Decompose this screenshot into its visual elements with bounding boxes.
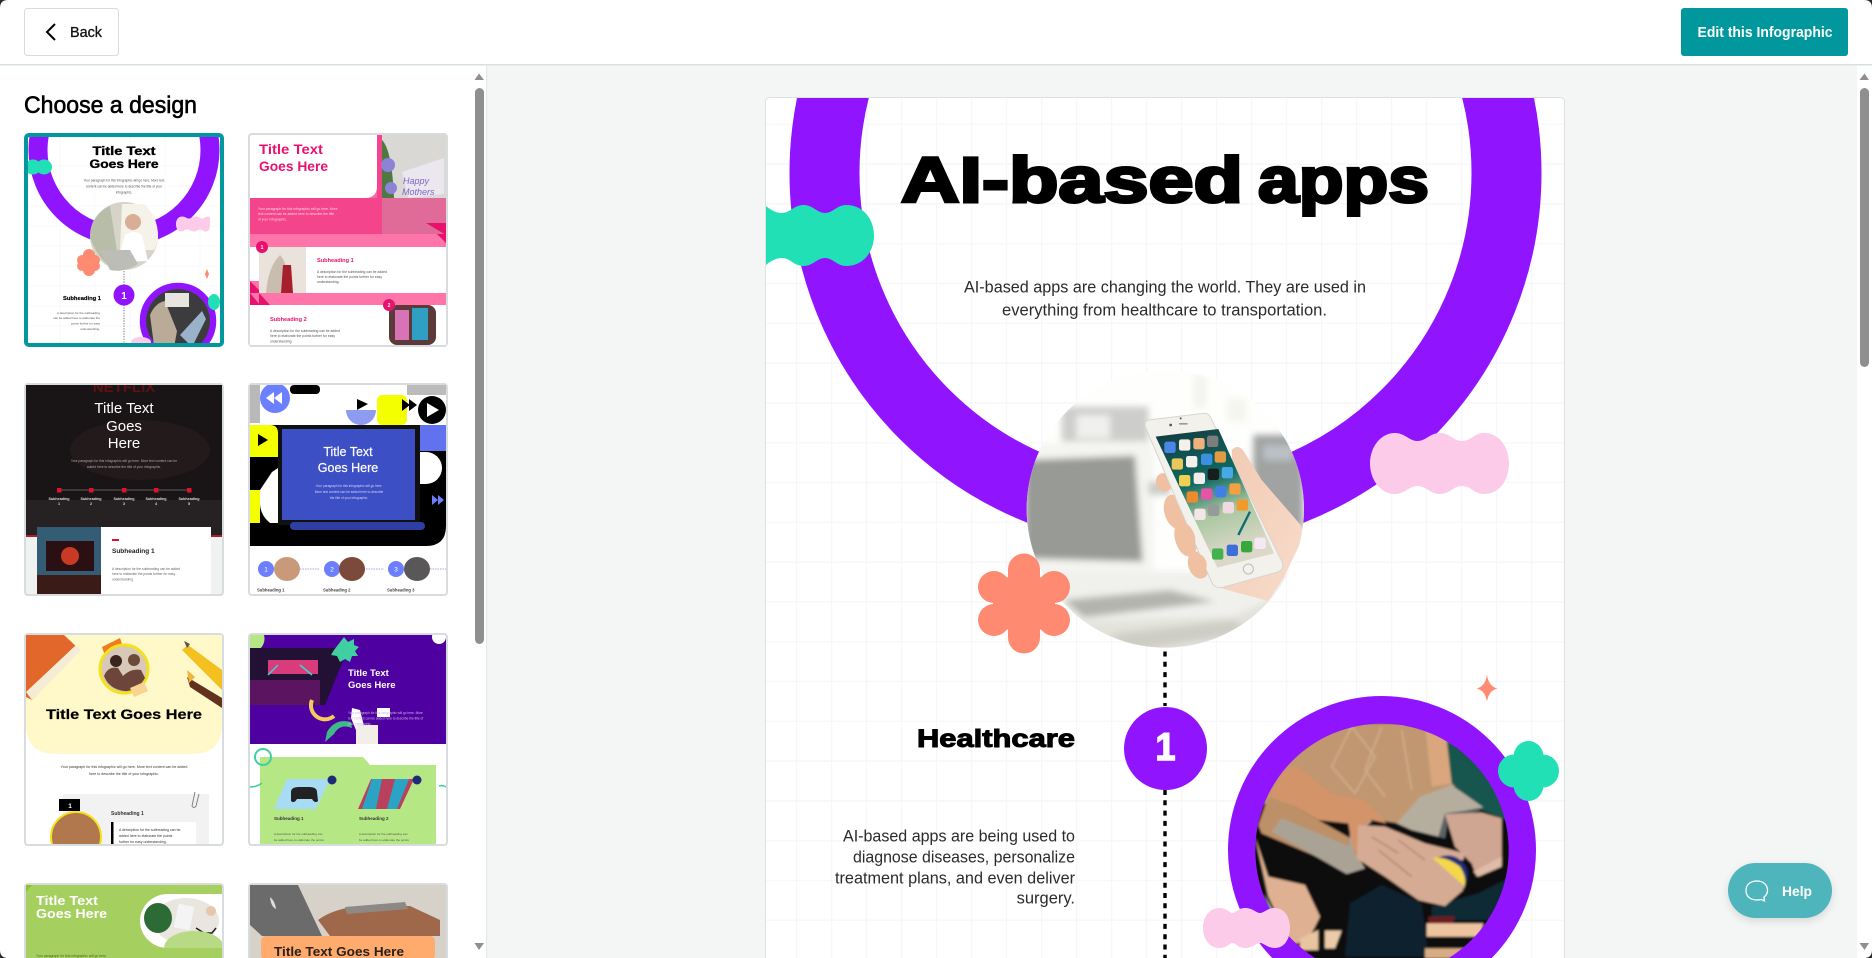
template thumbnail 3: netflix: here to elaborate the points further for easy (112, 572, 176, 576)
template thumbnail 5: school: 1 (68, 803, 72, 810)
blob: pink (1370, 433, 1509, 494)
left scrollbar (474, 65, 488, 958)
header bar (0, 0, 1872, 66)
template thumbnail 6: concert: A description for the subheading can (359, 832, 408, 836)
template thumbnail 3: netflix: Here (108, 435, 140, 452)
purple ring (824, 0, 1506, 514)
template thumbnail 1: selected: infographic. (116, 190, 132, 194)
back button (24, 8, 118, 56)
right scrollbar (1857, 66, 1872, 958)
template thumbnail 5: school: here to describe the title of your infographic. (89, 772, 159, 776)
template thumbnail 2: mothers day: Subheading 2 (270, 317, 307, 323)
template thumbnail 1: selected: Goes Here (90, 159, 158, 171)
template thumbnail 3: netflix: understanding. (112, 578, 134, 582)
template thumbnail 2: mothers day: A description for the subheading can be added (317, 270, 387, 274)
template thumbnail 3: netflix (25, 379, 223, 595)
template thumbnail 3: netflix: Subheading 1 (112, 548, 155, 555)
template thumbnail 3: netflix: Subheading (178, 497, 200, 501)
photo ring: elderly hands (1242, 710, 1522, 958)
template thumbnail 3: netflix: Title Text (94, 400, 154, 417)
heading: choose a design: Choose a design (24, 92, 197, 119)
template thumbnail 2: mothers day: Subheading 1 (317, 258, 354, 264)
template thumbnail 6: concert: Title Text (348, 668, 390, 679)
template thumbnail 3: netflix: A description for the subheading can be added (112, 567, 180, 571)
template thumbnail 4: media player: Title Text (323, 445, 373, 459)
template thumbnail 6: concert: Subheading 1 (274, 816, 304, 821)
template thumbnail 2: mothers day: A description for the subheading can be added (270, 329, 340, 333)
template thumbnail 1: selected: Your paragraph for this infographic will go here. More text (84, 178, 165, 182)
template thumbnail 1: selected: content can be added here to describe the title of your (86, 184, 163, 188)
template thumbnail 3: netflix: added here to describe the title of your infographic. (87, 465, 161, 469)
template thumbnail 2: mothers day: of your infographic. (258, 218, 287, 222)
healthcare description: treatment plans, and even deliver (835, 870, 1075, 888)
template thumbnail 8: payment (249, 884, 447, 958)
phone body (1145, 413, 1283, 588)
photo: hand holding smartphone (1020, 365, 1310, 655)
template thumbnail 4: media player: 1 (264, 566, 268, 574)
template thumbnail 6: concert (249, 630, 447, 846)
template thumbnail 5: school: Title Text Goes Here (46, 707, 203, 722)
icon: coral sparkle (1476, 674, 1498, 702)
template thumbnail 3: netflix: Subheading (48, 497, 70, 501)
template thumbnail 5: school: added here to elaborate the points (119, 834, 173, 838)
template thumbnail 6: concert: be added here to elaborate the points (274, 838, 324, 842)
template thumbnail 2: mothers day: text content can be added here to describe the title (258, 212, 334, 216)
intro paragraph: AI-based apps are changing the world. They are used in (964, 278, 1366, 296)
template thumbnail 3: netflix: 4 (155, 502, 158, 506)
template thumbnail 3: netflix: Subheading (113, 497, 135, 501)
healthcare description: diagnose diseases, personalize (853, 848, 1075, 866)
main title (900, 154, 1428, 217)
template thumbnail 3: netflix: 2 (90, 502, 92, 506)
fingertips over phone edge (1186, 524, 1207, 570)
template thumbnail 6: concert: Your paragraph for this infographic will go here. More (348, 711, 423, 715)
template thumbnail 6: concert: Goes Here (348, 680, 396, 691)
help button: Help (1782, 883, 1812, 899)
template thumbnail 5: school: Subheading 1 (111, 811, 144, 817)
healthcare description (835, 828, 1075, 908)
template thumbnail 3: netflix: Your paragraph for this infographic will go here. More text content can be (71, 459, 177, 463)
template thumbnail 4: media player: Goes Here (318, 461, 378, 475)
template thumbnail 3: netflix: Subheading (80, 497, 102, 501)
blob: small pink (1203, 908, 1290, 948)
template thumbnail 2: mothers day: Happy (403, 176, 430, 186)
template thumbnail 3: netflix: Goes (106, 418, 142, 435)
template thumbnail 1: selected: 1 (121, 291, 127, 302)
template thumbnail 2: mothers day (249, 134, 447, 346)
template thumbnail 4: media player: 2 (330, 566, 334, 574)
intro paragraph: everything from healthcare to transportation. (1002, 302, 1327, 320)
template thumbnail 5: school: A description for the subheading can be (119, 828, 181, 832)
healthcare description: AI-based apps are being used to (843, 828, 1075, 846)
template thumbnail 1: selected (24, 133, 224, 347)
template thumbnail 2: mothers day: 2 (388, 303, 391, 309)
template thumbnail 2: mothers day: Mothers (402, 187, 435, 197)
template thumbnail 1: selected: can be added here to elaborate the (53, 316, 100, 320)
template thumbnail 2: mothers day: here to elaborate the points further for easy (270, 334, 335, 338)
template thumbnail 4: media player (249, 383, 447, 595)
blob: teal (766, 205, 874, 266)
dashed connector (1163, 652, 1167, 958)
template thumbnail 2: mothers day: understanding. (317, 280, 339, 284)
intro paragraph (964, 278, 1366, 320)
subheading: healthcare: Healthcare (917, 725, 1075, 753)
template thumbnail 7: green: Goes Here (36, 906, 107, 921)
template thumbnail 2: mothers day: Your paragraph for this infographic will go here. More (258, 207, 338, 211)
template thumbnail 1: selected: Title Text (92, 146, 156, 158)
template thumbnail 4: media player: the title of your infographic. (330, 496, 368, 500)
back button: Back (70, 24, 102, 41)
template thumbnail 7: green: Your paragraph for this infographic will go here. (36, 954, 107, 958)
blob: coral flower (978, 554, 1070, 654)
main title: AI-based (901, 144, 1243, 216)
template thumbnail 4: media player: More text content can be added here to describe (315, 490, 384, 494)
template thumbnail 1: selected: Subheading 1 (63, 296, 102, 302)
main title: apps (1258, 144, 1429, 216)
template thumbnail 7: green: Title Text (36, 893, 99, 908)
template thumbnail 2: mothers day: here to elaborate the points further for easy (317, 275, 382, 279)
template thumbnail 2: mothers day: 1 (261, 245, 264, 251)
template thumbnail 2: mothers day: Title Text (259, 142, 324, 157)
template thumbnail 4: media player: Subheading 3 (387, 588, 415, 592)
hand behind the phone (1217, 447, 1303, 601)
template thumbnail 5: school: further for easy understanding. (119, 840, 167, 844)
template thumbnail 4: media player: Subheading 1 (257, 588, 285, 592)
template thumbnail 3: netflix: 1 (58, 502, 60, 506)
blob: teal clover (1498, 741, 1559, 801)
template thumbnail 2: mothers day: Goes Here (259, 159, 328, 174)
step number badge (1124, 707, 1207, 790)
template thumbnail 6: concert: text content can be added here to describe the title of (348, 716, 423, 720)
template thumbnail 3: netflix: Subheading (145, 497, 167, 501)
template thumbnail 6: concert: be added here to elaborate the points (359, 838, 409, 842)
edit button: Edit this Infographic (1698, 25, 1832, 41)
healthcare description: surgery. (1017, 890, 1075, 908)
template thumbnail 2: mothers day: understanding. (270, 340, 292, 344)
template thumbnail 7: green (25, 884, 224, 958)
template thumbnail 1: selected: points further for easy (71, 322, 100, 326)
edit button (1681, 8, 1848, 56)
template thumbnail 6: concert: A description for the subheading can (274, 832, 323, 836)
help button (1728, 863, 1832, 918)
template thumbnail 5: school (25, 634, 223, 862)
template thumbnail 4: media player: 3 (394, 566, 398, 574)
template thumbnail 1: selected: A description for the subheading (57, 311, 100, 315)
template thumbnail 4: media player: Your paragraph for this infographic will go here. (316, 484, 382, 488)
template thumbnail 3: netflix: 3 (123, 502, 125, 506)
template thumbnail 3: netflix: 5 (188, 502, 190, 506)
template thumbnail 1: selected: understanding. (80, 327, 100, 331)
step number badge: 1 (1156, 726, 1176, 769)
template thumbnail 3: netflix: NETFLIX (93, 379, 155, 396)
workspace background (488, 65, 1857, 958)
template thumbnail 5: school: Your paragraph for this infographic will go here. More text content can be added (61, 765, 187, 769)
template thumbnail 6: concert: your infographic. (348, 722, 372, 726)
template thumbnail 4: media player: Subheading 2 (323, 588, 351, 592)
panel: infographic page (765, 97, 1565, 958)
template thumbnail 6: concert: Subheading 2 (359, 816, 389, 821)
